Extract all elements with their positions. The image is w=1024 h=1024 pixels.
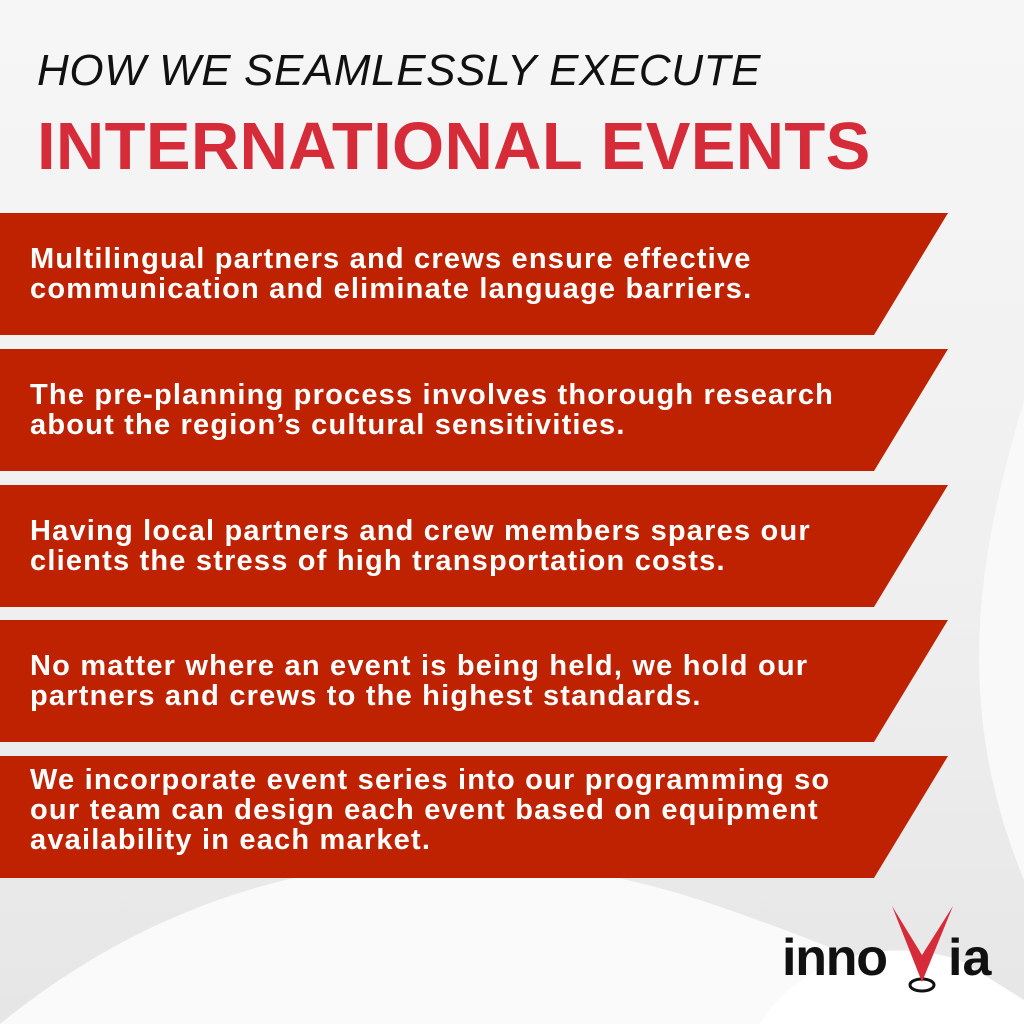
banner 3 bbox=[0, 485, 948, 607]
banner 3: clients the stress of high transportation costs. bbox=[30, 545, 726, 577]
logo: innovia bbox=[782, 906, 992, 992]
banner 1: communication and eliminate language barriers. bbox=[30, 273, 752, 305]
banner 4 bbox=[0, 620, 948, 742]
banner 5: We incorporate event series into our programming so bbox=[30, 764, 830, 796]
banner 1 bbox=[0, 213, 948, 335]
logo: innovia: inno bbox=[782, 929, 888, 987]
title line 2: INTERNATIONAL EVENTS bbox=[37, 109, 871, 184]
banner 2 bbox=[0, 349, 948, 471]
banner 3: Having local partners and crew members spares our bbox=[30, 515, 811, 547]
title line 1: HOW WE SEAMLESSLY EXECUTE bbox=[37, 46, 761, 95]
banner 4: No matter where an event is being held, we hold our bbox=[30, 650, 808, 682]
banner 5 bbox=[0, 756, 948, 878]
banner 5: our team can design each event based on equipment bbox=[30, 794, 819, 826]
banner 2: about the region’s cultural sensitivities. bbox=[30, 409, 626, 441]
banner 4: partners and crews to the highest standards. bbox=[30, 680, 702, 712]
banner 5: availability in each market. bbox=[30, 824, 431, 856]
banner 1: Multilingual partners and crews ensure effective bbox=[30, 243, 752, 275]
banner 2: The pre-planning process involves thorough research bbox=[30, 379, 834, 411]
logo: innovia: ia bbox=[948, 929, 992, 987]
